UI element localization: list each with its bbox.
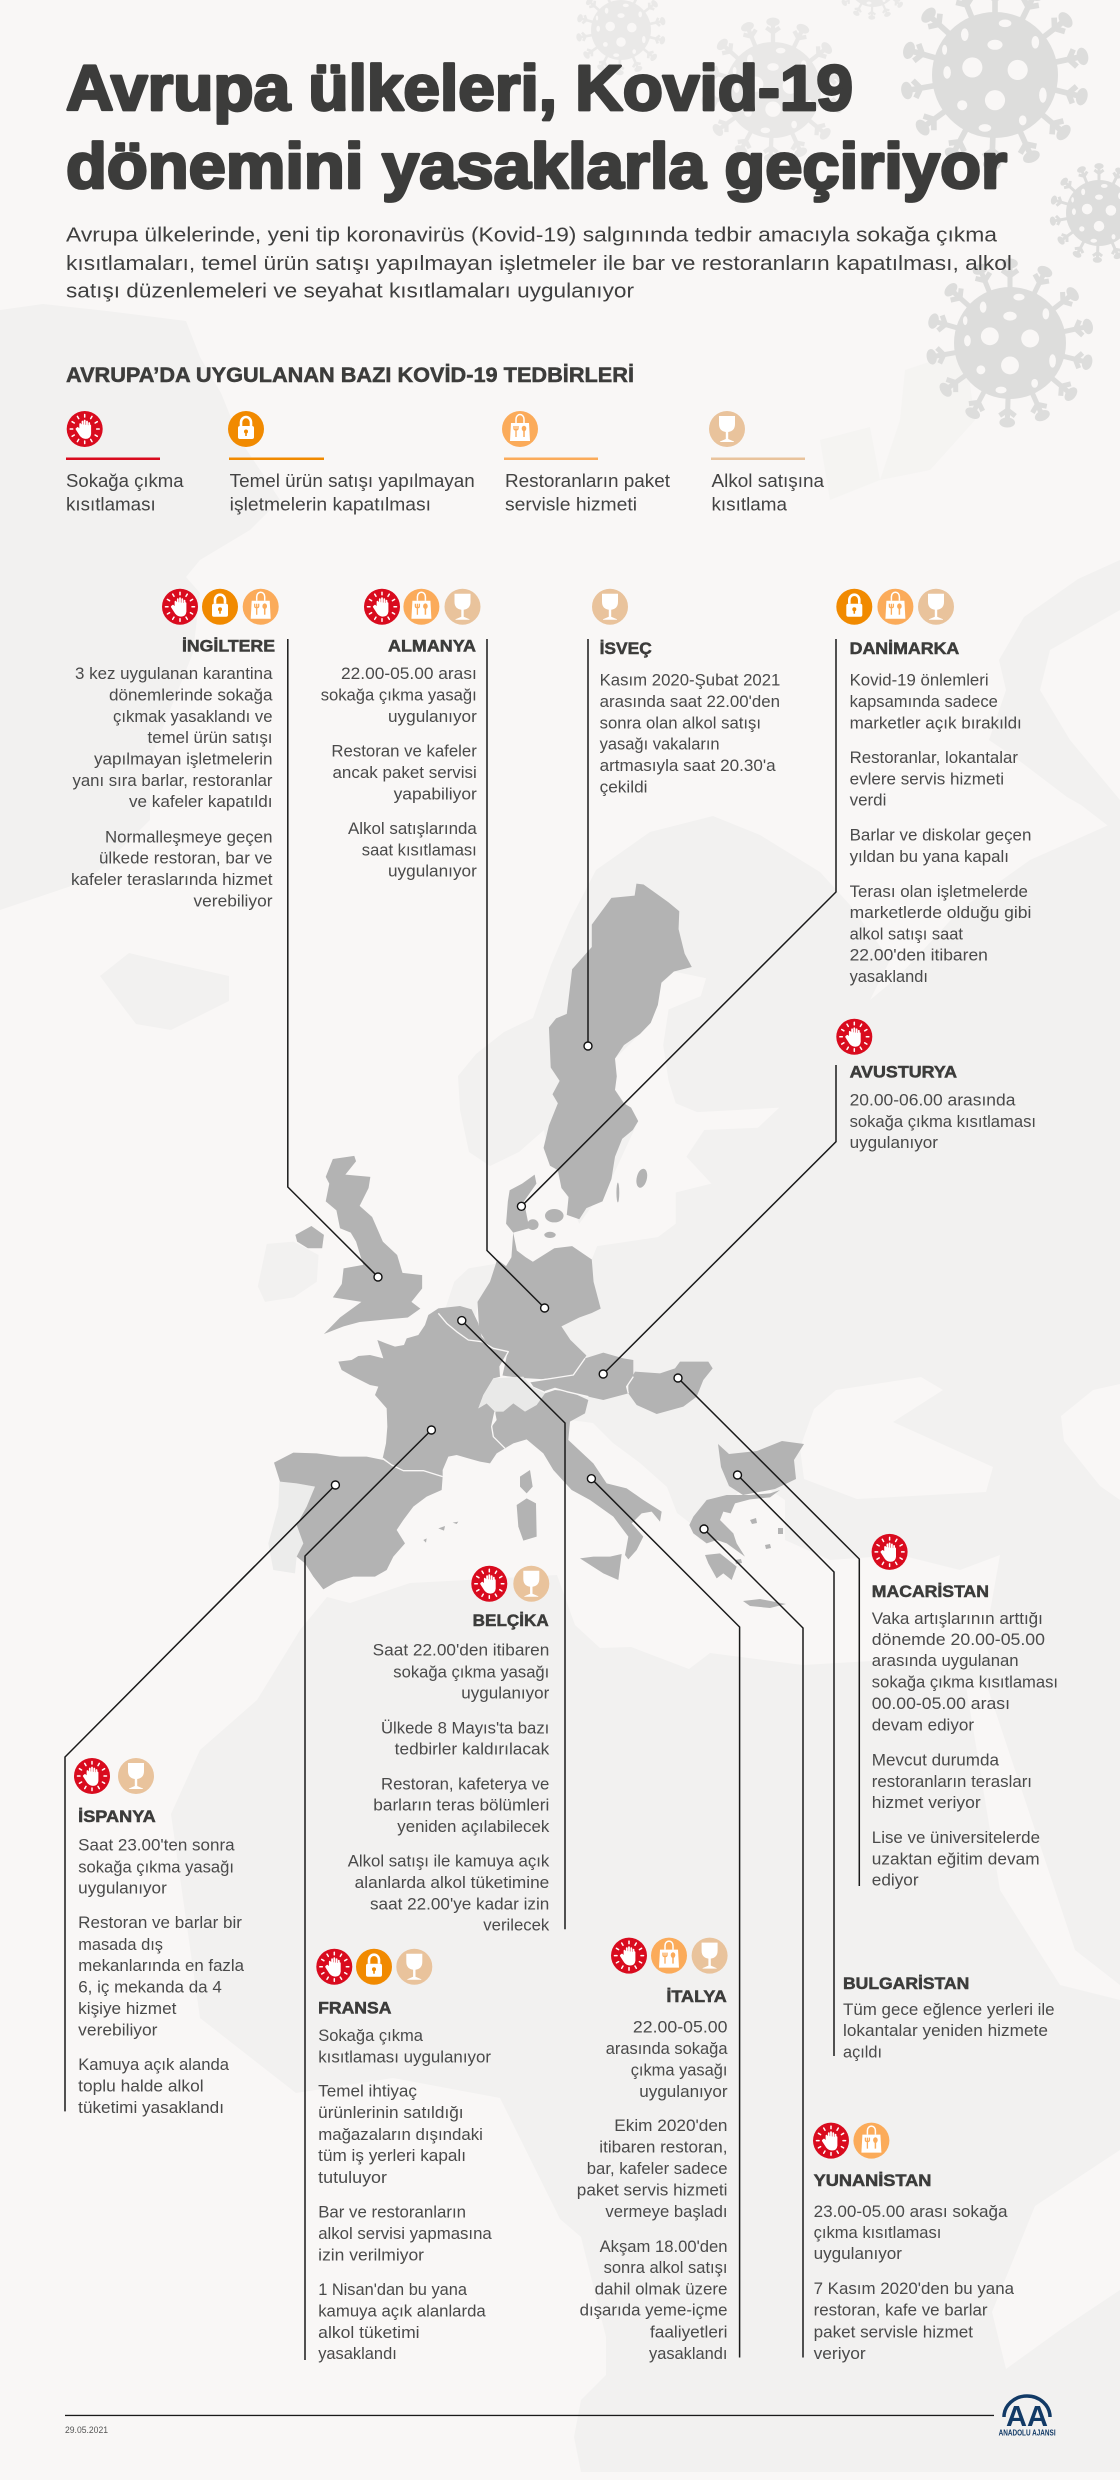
body text	[872, 1609, 1058, 1890]
icons	[611, 1938, 728, 1974]
body text: mağazaların dışındaki	[318, 2125, 483, 2144]
heading: BELÇİKA	[473, 1612, 549, 1630]
country: great britain	[324, 1156, 422, 1334]
body text: ancak paket servisi	[332, 763, 477, 782]
body text: verebiliyor	[194, 891, 273, 910]
body text: uygulanıyor	[461, 1684, 550, 1703]
body text	[318, 2026, 492, 2363]
body text: yasaklandı	[850, 967, 928, 986]
legend	[66, 411, 825, 515]
body text: uygulanıyor	[639, 2082, 728, 2101]
island: corsica	[520, 1470, 533, 1493]
body text: kapsamında sadece	[850, 692, 998, 711]
body text: Tüm gece eğlence yerleri ile	[843, 2000, 1055, 2019]
legend item: takeaway service: Restoranların paket	[505, 470, 670, 491]
country: hungary	[628, 1362, 713, 1414]
heading: ALMANYA	[388, 638, 476, 656]
land: ireland	[258, 1242, 319, 1302]
legend item: takeaway service: servisle hizmeti	[505, 494, 637, 515]
body text: verdi	[850, 791, 886, 810]
body text: Akşam 18.00'den	[600, 2237, 728, 2256]
country: austria	[530, 1353, 633, 1400]
virus: faded top	[576, 0, 666, 75]
body text: 22.00-05.00 arası	[341, 664, 477, 683]
body text: Restoran ve barlar bir	[78, 1913, 242, 1932]
body text: sokağa çıkma yasağı	[393, 1662, 549, 1681]
seas over background land	[511, 972, 1120, 2369]
panel: danimarka	[836, 589, 1031, 986]
body text: dönemlerinde sokağa	[109, 686, 273, 704]
body text: sokağa çıkma yasağı	[321, 686, 477, 704]
country: portugal	[268, 1482, 315, 1573]
country: spain	[274, 1453, 443, 1589]
legend item: alcohol restriction: kısıtlama	[712, 494, 788, 515]
icon	[836, 1019, 872, 1055]
body text: 00.00-05.00 arası	[872, 1694, 1010, 1713]
body text: restoran, kafe ve barlar	[814, 2301, 988, 2320]
country: northern ireland	[295, 1226, 324, 1248]
legend item: curfew	[66, 411, 184, 515]
body text: Restoranlar, lokantalar	[850, 748, 1018, 767]
heading: BULGARİSTAN	[843, 1975, 969, 1993]
virus: large top right	[900, 0, 1090, 170]
island: gotland	[634, 1167, 649, 1190]
land: netherlands	[445, 1264, 495, 1315]
leader: isvec	[584, 639, 592, 1050]
leader: belcika	[458, 1317, 565, 1929]
sea: red sea	[965, 1680, 1120, 2000]
sea: black sea	[800, 1377, 993, 1499]
country: denmark	[506, 1175, 564, 1238]
body text: veriyor	[814, 2344, 866, 2363]
body text: lokantalar yeniden hizmete	[843, 2021, 1048, 2040]
country: italy	[492, 1390, 662, 1559]
body text: yapabiliyor	[394, 784, 477, 803]
body text: izin verilmiyor	[318, 2246, 424, 2265]
panel: italya	[577, 1938, 728, 2363]
body text: yanı sıra barlar, restoranlar	[72, 771, 273, 790]
leader: ingiltere	[288, 639, 382, 1281]
icons	[836, 589, 954, 625]
panel: ispanya	[74, 1758, 245, 2117]
body text: Normalleşmeye geçen	[105, 827, 272, 846]
body text: arasında saat 22.00'den	[600, 692, 780, 711]
body text: 6, iç mekanda da 4	[78, 1978, 222, 1996]
footer	[65, 2396, 1056, 2438]
body text: arasında uygulanan	[872, 1651, 1019, 1670]
body text: saat kısıtlaması	[362, 840, 477, 859]
country: peloponnese	[705, 1553, 737, 1580]
body text: Saat 23.00'ten sonra	[78, 1836, 235, 1855]
legend item: closure of non-essential businesses: Temel ürün satışı yapılmayan	[230, 470, 475, 491]
virus: faded centre	[700, 18, 845, 163]
body text	[78, 1836, 245, 2117]
virus: faded top edge	[835, 0, 911, 20]
map: southern countries	[268, 1306, 780, 1589]
body text: alkol servisi yapmasına	[318, 2224, 492, 2243]
body text: dışarıda yeme-içme	[580, 2301, 728, 2320]
panel: yunanistan	[813, 2123, 1015, 2363]
icon	[592, 589, 628, 625]
body text: paket servisle hizmet	[814, 2322, 973, 2342]
body text: uzaktan eğitim devam	[872, 1849, 1040, 1868]
footer rule	[65, 2415, 994, 2416]
body text: dahil olmak üzere	[595, 2279, 728, 2298]
section heading: AVRUPA’DA UYGULANAN BAZI KOVİD-19 TEDBİRLERİ	[66, 364, 634, 387]
body text: bar, kafeler sadece	[587, 2159, 728, 2178]
body text: Alkol satışı ile kamuya açık	[348, 1852, 550, 1871]
body text: ülkede restoran, bar ve	[99, 849, 272, 868]
viruses	[576, 0, 1120, 428]
body text: temel ürün satışı	[148, 728, 272, 747]
leader: bulgaristan	[734, 1471, 834, 2056]
intro text: kısıtlamaları, temel ürün satışı yapılmayan işletmeler ile bar ve restoranların kapatılması, alkol	[66, 252, 1012, 275]
title	[66, 52, 1007, 202]
body text: açıldı	[843, 2042, 882, 2062]
body text: Ekim 2020'den	[614, 2116, 728, 2135]
body text: Bar ve restoranların	[318, 2202, 466, 2221]
icon	[872, 1534, 908, 1570]
body text: saat 22.00'ye kadar izin	[370, 1894, 549, 1913]
legend item: curfew: Sokağa çıkma	[66, 470, 184, 491]
body text: kamuya açık alanlarda	[318, 2301, 486, 2320]
body text: Terası olan işletmelerde	[850, 882, 1028, 901]
body text: barların teras bölümleri	[373, 1796, 549, 1815]
body text: Kamuya açık alanda	[78, 2055, 230, 2074]
country: sweden	[544, 884, 692, 1219]
body text: sonra olan alkol satışı	[600, 713, 761, 732]
body text: Restoran, kafeterya ve	[381, 1774, 549, 1793]
sea: caspian	[1061, 1384, 1120, 1500]
body text: tutuluyor	[318, 2168, 387, 2187]
heading: İSPANYA	[78, 1808, 156, 1826]
borders	[383, 1313, 633, 1477]
body text: yasaklandı	[649, 2344, 728, 2363]
heading: DANİMARKA	[850, 640, 959, 658]
body text: Restoran ve kafeler	[331, 742, 477, 761]
virus: right edge	[1049, 163, 1120, 263]
land: novaya zemlya	[989, 560, 1120, 835]
europe map	[268, 884, 804, 1608]
land: iceland	[100, 953, 229, 1030]
legend item: closure of non-essential businesses	[228, 411, 475, 515]
country: greece	[689, 1490, 780, 1557]
map: northern countries	[295, 884, 692, 1379]
panel: avusturya	[836, 1019, 1036, 1152]
legend item: alcohol restriction	[709, 411, 825, 515]
body text: kişiye hizmet	[78, 1999, 177, 2018]
land: eurasia	[458, 816, 1120, 1800]
body text: Sokağa çıkma	[318, 2026, 424, 2045]
body text: toplu halde alkol	[78, 2076, 204, 2096]
body text: mekanlarında en fazla	[78, 1956, 245, 1975]
body text: artmasıyla saat 20.30'a	[600, 756, 776, 775]
body text: hizmet veriyor	[872, 1793, 981, 1812]
body text: 7 Kasım 2020'den bu yana	[814, 2279, 1015, 2298]
body text: masada dış	[78, 1935, 163, 1954]
body text	[843, 2000, 1055, 2062]
body text: kısıtlaması uygulanıyor	[318, 2048, 491, 2067]
land: svalbard	[820, 350, 975, 500]
islands: balearic	[423, 1522, 458, 1543]
body text	[71, 664, 273, 910]
leader: danimarka	[517, 639, 836, 1210]
panel: bulgaristan	[843, 1975, 1055, 2062]
body text: 22.00-05.00	[633, 2018, 728, 2036]
body text: sokağa çıkma kısıtlaması	[872, 1672, 1058, 1692]
body text	[600, 670, 780, 796]
leader: yunanistan	[700, 1525, 803, 2358]
legend item: closure of non-essential businesses: işletmelerin kapatılması	[230, 494, 431, 515]
body text: tüm iş yerleri kapalı	[318, 2146, 466, 2165]
body text: Vaka artışlarının arttığı	[872, 1609, 1043, 1628]
heading: İTALYA	[666, 1988, 727, 2006]
leader: macaristan	[674, 1374, 859, 1886]
body text: faaliyetleri	[650, 2322, 728, 2342]
body text: yasaklandı	[318, 2344, 397, 2363]
intro text: Avrupa ülkelerinde, yeni tip koronavirüs (Kovid-19) salgınında tedbir amacıyla sokağa çıkma	[66, 224, 998, 247]
logo: anadolu ajansi: ANADOLU AJANSI	[999, 2429, 1056, 2438]
body text: çıkma kısıtlaması	[814, 2223, 941, 2242]
title: Avrupa ülkeleri, Kovid-19	[66, 52, 853, 124]
body text: sonra alkol satışı	[604, 2258, 728, 2277]
country: germany	[477, 1233, 601, 1379]
island: sicily	[580, 1554, 622, 1580]
body text: 22.00'den itibaren	[850, 946, 988, 965]
body text: ve kafeler kapatıldı	[129, 792, 272, 811]
body text: ürünlerinin satıldığı	[318, 2103, 464, 2122]
body text: vermeye başladı	[605, 2202, 728, 2221]
body text: kafeler teraslarında hizmet	[71, 870, 273, 889]
body text: tüketimi yasaklandı	[78, 2098, 224, 2117]
body text: çekildi	[600, 777, 648, 796]
body text: alkol tüketimi	[318, 2323, 420, 2342]
island: oland	[616, 1183, 619, 1202]
body text: Alkol satışlarında	[348, 819, 477, 838]
body text: 23.00-05.00 arası sokağa	[814, 2202, 1008, 2221]
body text: tedbirler kaldırılacak	[395, 1740, 550, 1759]
leader lines	[65, 639, 859, 2360]
body text: yasağı vakaların	[600, 734, 720, 753]
body text	[850, 670, 1031, 986]
date: 29.05.2021	[65, 2425, 108, 2436]
body text: yıldan bu yana kapalı	[850, 847, 1009, 866]
intro text	[66, 224, 1012, 303]
islands: aegean	[735, 1518, 783, 1564]
body text: Mevcut durumda	[872, 1751, 1000, 1770]
body text: paket servis hizmeti	[577, 2181, 728, 2200]
body text: Saat 22.00'den itibaren	[373, 1640, 549, 1659]
body text	[814, 2202, 1015, 2363]
panel: macaristan	[872, 1534, 1058, 1890]
leader: italya	[587, 1475, 740, 2358]
body text: uygulanıyor	[850, 1133, 938, 1152]
leader: almanya	[487, 639, 549, 1312]
body text: uygulanıyor	[388, 707, 477, 726]
island: crete	[743, 1599, 786, 1608]
body text: çıkma yasağı	[631, 2061, 728, 2080]
icons	[74, 1758, 154, 1794]
legend item: takeaway service	[502, 411, 670, 515]
intro text: satışı düzenlemeleri ve seyahat kısıtlamaları uygulanıyor	[66, 280, 634, 303]
panel: ingiltere	[71, 589, 279, 910]
body text: uygulanıyor	[388, 862, 477, 881]
panel: belcika	[348, 1566, 550, 1935]
icons	[364, 589, 480, 625]
body text: uygulanıyor	[78, 1878, 167, 1898]
body text: Lise ve üniversitelerde	[872, 1828, 1040, 1847]
body text: Temel ihtiyaç	[318, 2082, 417, 2100]
leader: fransa	[305, 1426, 435, 2360]
land: greenland	[0, 304, 280, 910]
body text: verilecek	[483, 1916, 550, 1935]
leader: avusturya	[599, 1065, 836, 1378]
body text: sokağa çıkma yasağı	[78, 1858, 234, 1877]
heading: İNGİLTERE	[182, 638, 275, 656]
body text: 1 Nisan'dan bu yana	[318, 2280, 468, 2299]
body text: yeniden açılabilecek	[397, 1817, 550, 1836]
body text: alkol satışı saat	[850, 925, 963, 944]
logo: anadolu ajansi	[999, 2396, 1056, 2438]
body text	[321, 664, 477, 881]
logo: anadolu ajansi: AA	[1006, 2401, 1048, 2433]
icons	[813, 2123, 889, 2159]
panel: fransa	[316, 1949, 492, 2363]
panel: almanya	[321, 589, 480, 881]
sea: baltic	[511, 972, 779, 1259]
legend item: alcohol restriction: Alkol satışına	[712, 470, 825, 491]
body text: Kasım 2020-Şubat 2021	[600, 670, 780, 690]
body text	[850, 1090, 1036, 1152]
body text: ediyor	[872, 1871, 919, 1890]
panel: isvec	[592, 589, 780, 796]
icons	[162, 589, 279, 625]
icons	[316, 1949, 432, 1985]
body text: 3 kez uygulanan karantina	[75, 664, 273, 683]
body text: marketlerde olduğu gibi	[850, 903, 1031, 922]
icons	[471, 1566, 549, 1602]
legend item: curfew: kısıtlaması	[66, 494, 156, 515]
body text: verebiliyor	[78, 2020, 158, 2039]
heading: AVUSTURYA	[850, 1063, 957, 1081]
body text: itibaren restoran,	[599, 2138, 728, 2156]
body text: devam ediyor	[872, 1716, 974, 1735]
body text: alanlarda alkol tüketimine	[355, 1873, 549, 1892]
body text: dönemde 20.00-05.00	[872, 1630, 1045, 1649]
land: africa and arabia	[171, 1575, 1120, 2472]
body text: 20.00-06.00 arasında	[850, 1090, 1016, 1109]
leader: ispanya	[65, 1481, 339, 2111]
heading: YUNANİSTAN	[814, 2172, 931, 2190]
body text	[577, 2018, 728, 2363]
island: sardinia	[517, 1498, 537, 1541]
heading: FRANSA	[318, 1999, 391, 2017]
country: bulgaria	[718, 1441, 804, 1495]
body text: yapılmayan işletmelerin	[94, 750, 272, 769]
title: dönemini yasaklarla geçiriyor	[66, 130, 1007, 202]
body text: Kovid-19 önlemleri	[850, 670, 989, 690]
body text: Barlar ve diskolar geçen	[850, 826, 1031, 844]
country: france and belgium	[338, 1306, 508, 1477]
body text	[348, 1640, 550, 1935]
body text: Ülkede 8 Mayıs'ta bazı	[381, 1718, 549, 1737]
country: switzerland	[478, 1377, 545, 1412]
body text: restoranların terasları	[872, 1772, 1032, 1791]
body text: sokağa çıkma kısıtlaması	[850, 1112, 1036, 1131]
sea: indian ocean	[992, 2150, 1120, 2369]
heading: İSVEÇ	[600, 640, 652, 658]
body text: çıkmak yasaklandı ve	[113, 707, 272, 726]
body text: evlere servis hizmeti	[850, 769, 1004, 788]
body text: uygulanıyor	[814, 2244, 902, 2263]
body text: marketler açık bırakıldı	[850, 713, 1022, 732]
heading: MACARİSTAN	[872, 1583, 989, 1601]
body text: arasında sokağa	[606, 2039, 728, 2058]
virus: lower right	[925, 258, 1094, 428]
